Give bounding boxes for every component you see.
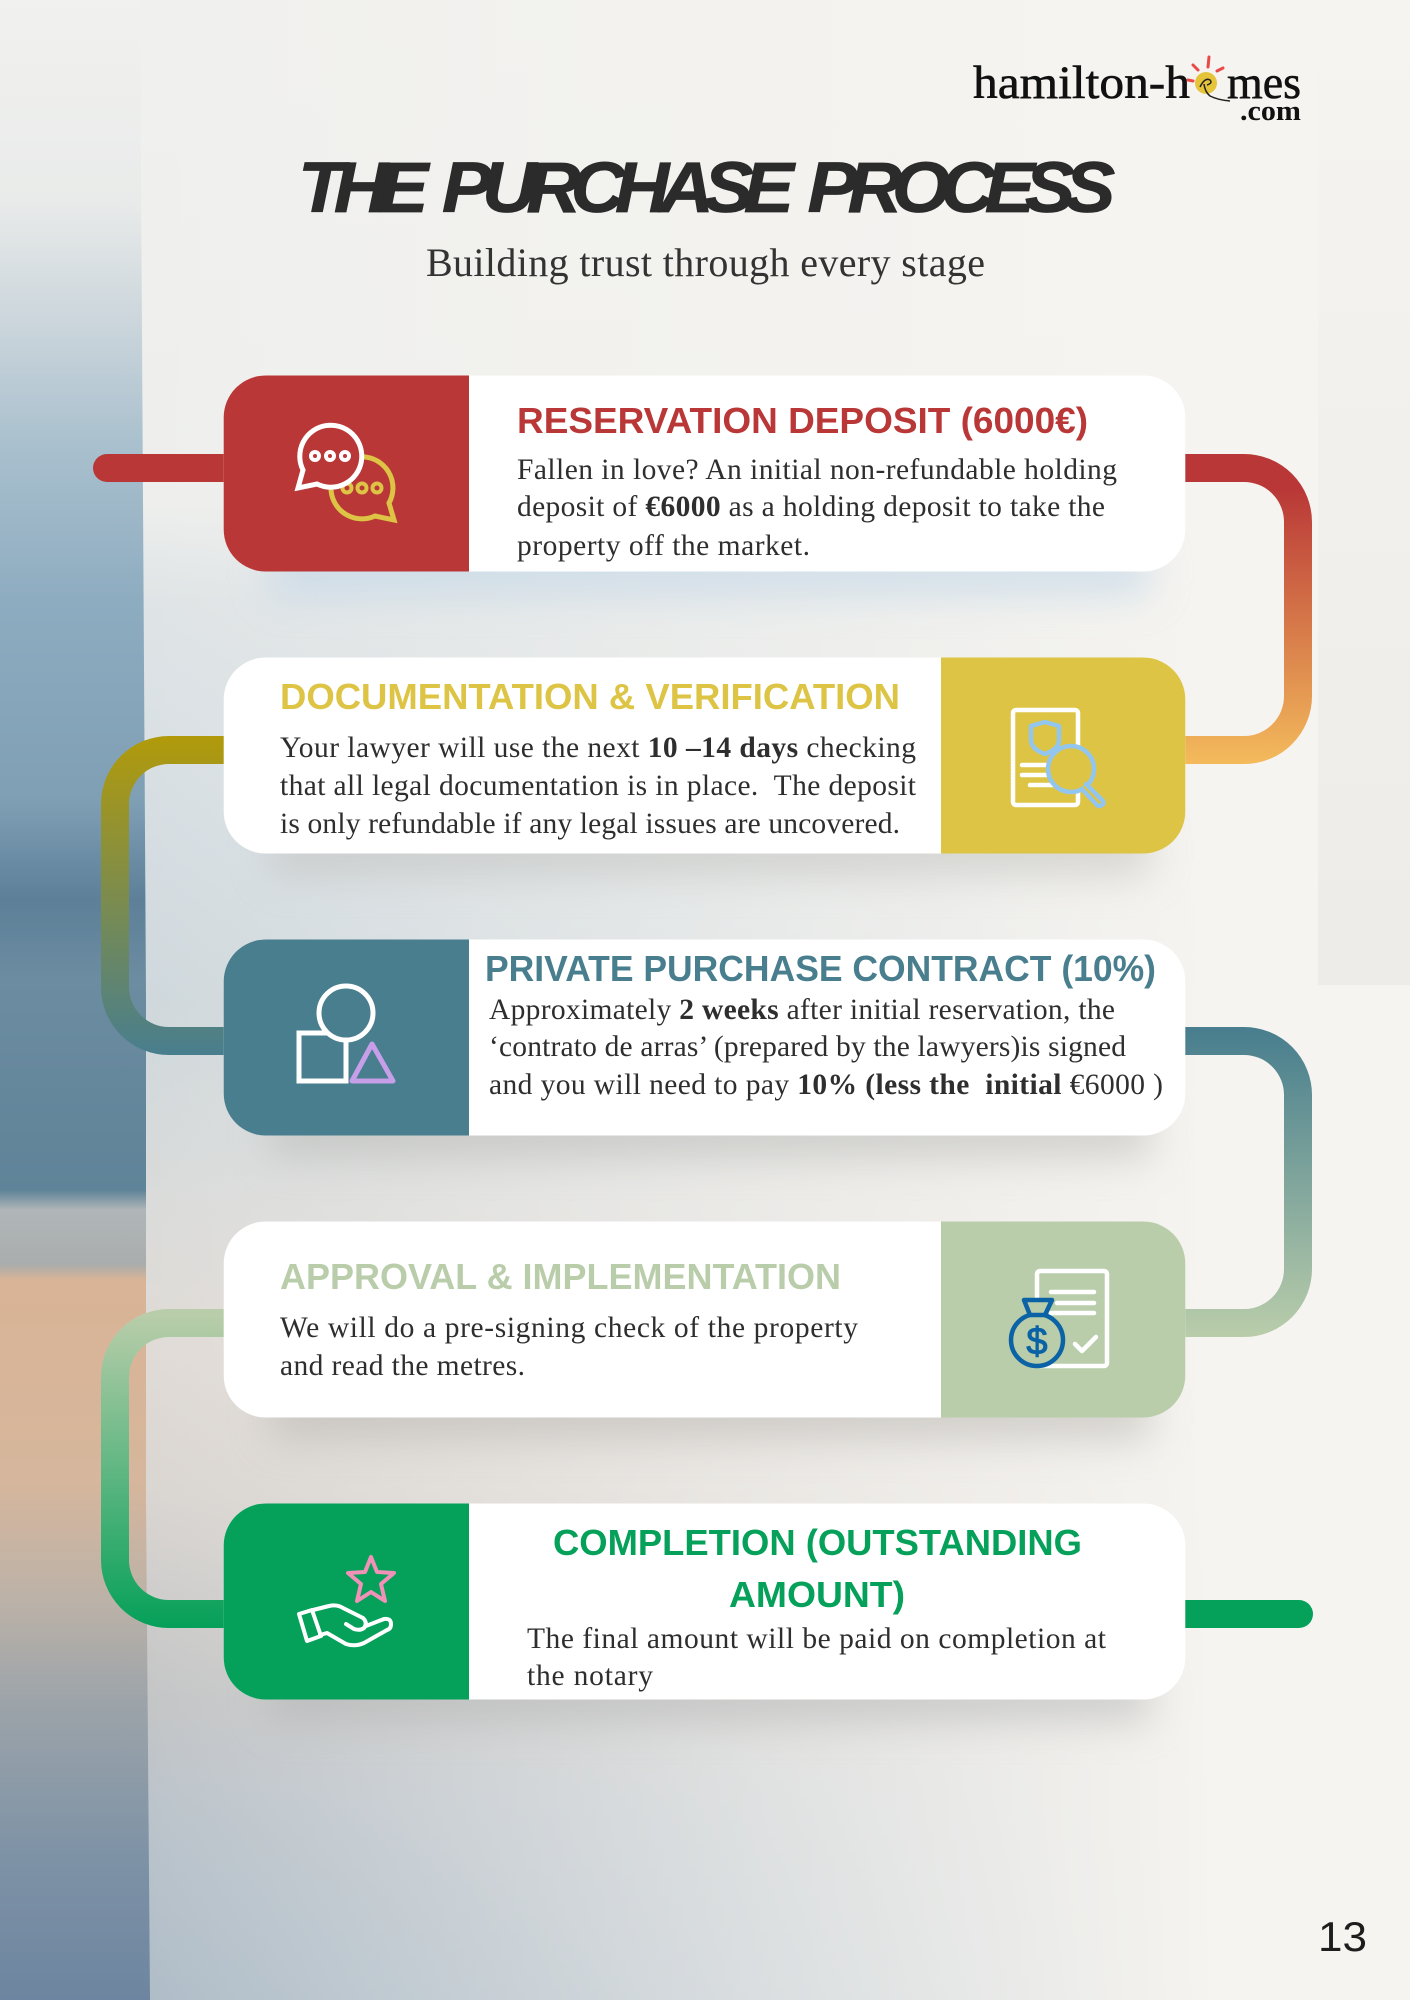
panel: private purchase contract bbox=[224, 940, 1185, 1157]
icon: money bag and checklist: $ bbox=[1026, 1321, 1048, 1363]
body text: property off the market. bbox=[517, 530, 810, 562]
body text: Your lawyer will use the next 10 –14 days checking bbox=[280, 732, 916, 764]
body text bbox=[280, 1312, 858, 1382]
heading: PRIVATE PURCHASE CONTRACT (10%) bbox=[485, 948, 1156, 989]
icon: document and magnifier bbox=[1013, 710, 1104, 806]
logo: .com bbox=[1240, 95, 1301, 127]
heading: DOCUMENTATION & VERIFICATION bbox=[280, 676, 900, 717]
panel: documentation and verification bbox=[224, 658, 1185, 875]
body text: deposit of €6000 as a holding deposit to take the bbox=[517, 491, 1105, 523]
body text bbox=[527, 1623, 1107, 1692]
body text: Fallen in love? An initial non-refundable holding bbox=[517, 454, 1117, 486]
heading: RESERVATION DEPOSIT (6000€) bbox=[517, 400, 1088, 441]
panel: approval and implementation bbox=[224, 1222, 1185, 1439]
logo: hamilton-h bbox=[973, 57, 1190, 109]
body text: is only refundable if any legal issues are uncovered. bbox=[280, 808, 900, 840]
body text: and read the metres. bbox=[280, 1350, 525, 1382]
icon: chat bubbles bbox=[298, 425, 394, 520]
panel: completion bbox=[224, 1504, 1185, 1721]
heading bbox=[553, 1522, 1082, 1615]
logo: mes bbox=[1227, 57, 1301, 109]
body text: and you will need to pay 10% (less the initial €6000 ) bbox=[489, 1069, 1163, 1101]
icon: money bag and checklist bbox=[1011, 1271, 1107, 1366]
body text bbox=[280, 732, 917, 840]
icon: hand and star bbox=[299, 1557, 394, 1645]
body text bbox=[517, 454, 1117, 562]
panel: reservation deposit bbox=[224, 376, 1185, 595]
connector: step 1 to 2 bbox=[1180, 468, 1298, 750]
body text bbox=[489, 994, 1163, 1101]
body text: ‘contrato de arras’ (prepared by the lawyers)is signed bbox=[489, 1031, 1126, 1063]
logo bbox=[973, 57, 1301, 127]
connector: start stub bbox=[107, 454, 230, 482]
heading: AMOUNT) bbox=[729, 1574, 905, 1615]
title: THE PURCHASE PROCESS bbox=[298, 148, 1115, 228]
body text: The final amount will be paid on completion at bbox=[527, 1623, 1107, 1655]
icon: shapes bbox=[299, 986, 393, 1081]
heading: COMPLETION (OUTSTANDING bbox=[553, 1522, 1082, 1563]
body text: that all legal documentation is in place. The deposit bbox=[280, 770, 917, 802]
body text: Approximately 2 weeks after initial reservation, the bbox=[489, 994, 1115, 1026]
page number: 13 bbox=[1318, 1913, 1367, 1960]
heading: APPROVAL & IMPLEMENTATION bbox=[280, 1256, 841, 1297]
subtitle: Building trust through every stage bbox=[426, 240, 985, 285]
connector: step 2 to 3 bbox=[115, 750, 230, 1041]
connector: step 4 to 5 bbox=[115, 1323, 230, 1614]
connector: end stub bbox=[1180, 1600, 1299, 1628]
connector: step 3 to 4 bbox=[1180, 1041, 1298, 1323]
body text: We will do a pre-signing check of the property bbox=[280, 1312, 858, 1344]
body text: the notary bbox=[527, 1660, 653, 1692]
